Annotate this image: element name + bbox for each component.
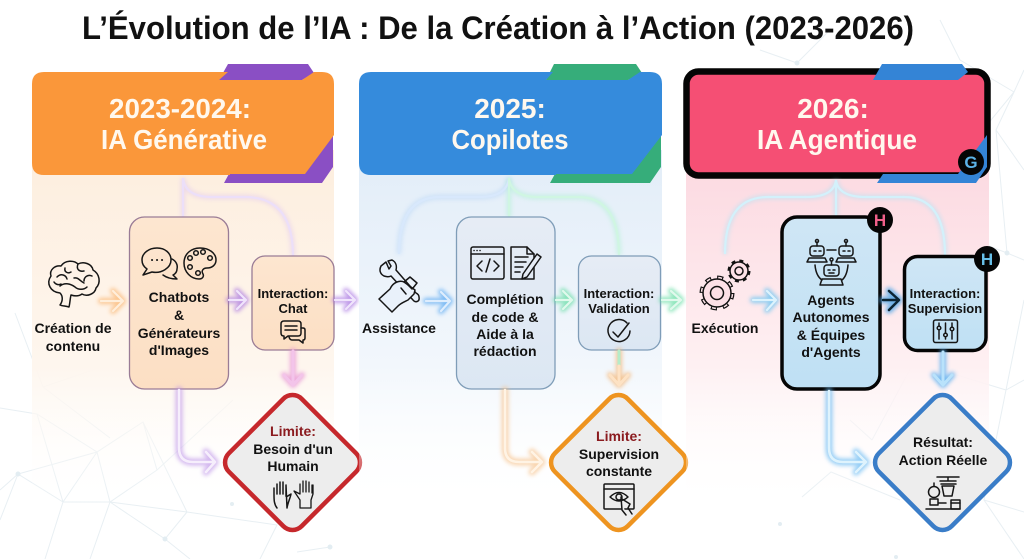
arrow: agents to result: [829, 391, 866, 472]
ribbon: green: [546, 64, 661, 183]
connectors: header to boxes: [399, 178, 619, 255]
box: Chatbots: d'Images: [149, 342, 209, 358]
box: Chatbots: Générateurs: [138, 325, 220, 341]
diamond: Limite Besoin d'un Humain: [220, 390, 365, 535]
diamond: Limite Supervision constante: Limite:: [596, 428, 642, 444]
arrow: completion to limit: [505, 390, 542, 472]
icon: brain: [49, 261, 99, 307]
header: 2026: 2026:: [797, 93, 869, 124]
badge: H pink: H: [874, 211, 886, 230]
box: Interaction Chat: [252, 256, 334, 350]
icon: robots: [807, 240, 856, 285]
diamond: Limite Supervision constante: Supervision: [579, 446, 659, 462]
connectors: header to boxes: [725, 180, 945, 255]
box: Chatbots: &: [174, 307, 184, 323]
box: Interaction Supervision: Supervision: [908, 301, 982, 316]
icon: wrench in hand: [379, 260, 419, 312]
box: Interaction Supervision: Interaction:: [910, 286, 980, 301]
arrow: chatbots to limit: [179, 390, 215, 472]
diamond: Limite Besoin d'un Humain: Besoin d'un: [253, 441, 333, 457]
badge: H blue: [974, 246, 1000, 272]
label: Création de contenu: [34, 320, 112, 354]
box: Complétion: rédaction: [473, 343, 537, 359]
ribbon: purple: [219, 64, 333, 183]
diamond: Limite Supervision constante: constante: [586, 463, 652, 479]
ribbon: blue: [873, 64, 987, 183]
header: 2023-2024: [32, 72, 334, 175]
connectors: header to boxes: [183, 178, 293, 256]
icon: check circle: [608, 320, 630, 342]
box: Agents Autonomes: [782, 217, 880, 389]
panel: 2025 Copilotes: [359, 64, 691, 535]
label: Création de contenu: contenu: [46, 338, 100, 354]
box: Chatbots: [130, 217, 228, 389]
box: Interaction Supervision: [904, 256, 986, 350]
icon: chat bubbles: [142, 248, 177, 279]
badge: G: [958, 149, 984, 175]
arrow: validation to next column: [662, 291, 681, 309]
box: Interaction Validation: [578, 256, 660, 350]
box: Agents Autonomes: Autonomes: [792, 309, 870, 325]
icon: gears: [703, 262, 748, 307]
arrow: agents to supervision: [883, 291, 899, 310]
box: Interaction Validation: Validation: [588, 301, 650, 316]
badge: H pink: [867, 207, 893, 233]
label: Création de contenu: Création de: [34, 320, 112, 336]
icon: hands: [274, 481, 313, 508]
box: Complétion: [456, 217, 555, 389]
arrow: chatbots to chat: [229, 291, 246, 309]
icon: eye window: [604, 484, 634, 515]
box: Complétion: Aide à la: [476, 326, 534, 342]
arrow: chat to limit: [284, 351, 302, 385]
box: Chatbots: Chatbots: [149, 289, 210, 305]
diamond: Résultat Action Réelle: Résultat:: [913, 434, 973, 450]
header: 2023-2024: 2023-2024:: [109, 93, 251, 124]
box: Interaction Validation: Interaction:: [584, 286, 654, 301]
arrow: validation to limit: [610, 351, 628, 385]
badge: G: G: [964, 153, 978, 172]
box: Interaction Chat: Interaction:: [258, 286, 328, 301]
header: 2026: [686, 72, 988, 176]
diamond: Limite Besoin d'un Humain: Humain: [267, 458, 319, 474]
diamond: Limite Besoin d'un Humain: Limite:: [270, 423, 316, 439]
arrow: assistance to completion: [426, 292, 450, 311]
box: Agents Autonomes: d'Agents: [801, 344, 861, 360]
header: 2026: IA Agentique: [757, 124, 917, 155]
header: 2023-2024: IA Générative: [101, 124, 267, 155]
label: Exécution: Exécution: [692, 320, 758, 336]
arrow: completion to validation: [556, 291, 572, 309]
header: 2025: Copilotes: [452, 124, 568, 155]
arrow: execution to agents: [753, 291, 776, 310]
icon: palette: [184, 248, 216, 279]
box: Complétion: de code &: [472, 309, 538, 325]
box: Complétion: Complétion: [466, 291, 544, 307]
icon: document and pen: [511, 247, 541, 279]
label: Assistance: Assistance: [362, 320, 436, 336]
box: Agents Autonomes: & Équipes: [797, 327, 865, 343]
arrow: chat to next column: [335, 291, 355, 309]
badge: H blue: H: [981, 250, 993, 269]
icon: sliders: [934, 320, 958, 342]
icon: robot with drone and parcel: [926, 477, 960, 509]
diamond: Résultat Action Réelle: [870, 390, 1015, 535]
header: 2025: [359, 72, 662, 175]
panel: 2023-2024 IA Générative: [32, 64, 365, 535]
diamond: Limite Supervision constante: [546, 390, 691, 535]
panel: 2026 IA Agentique: [686, 64, 1015, 535]
icon: message: [281, 321, 305, 343]
arrow: brain to chatbots: [101, 291, 123, 311]
diamond: Résultat Action Réelle: Action Réelle: [899, 452, 988, 468]
icon: code window: [471, 247, 504, 279]
header: 2025: 2025:: [474, 93, 546, 124]
title: L’Évolution de l’IA : De la Création à l’Action (2023-2026): [82, 10, 914, 46]
box: Agents Autonomes: Agents: [807, 292, 855, 308]
arrow: supervision to result: [934, 352, 952, 385]
box: Interaction Chat: Chat: [279, 301, 308, 316]
